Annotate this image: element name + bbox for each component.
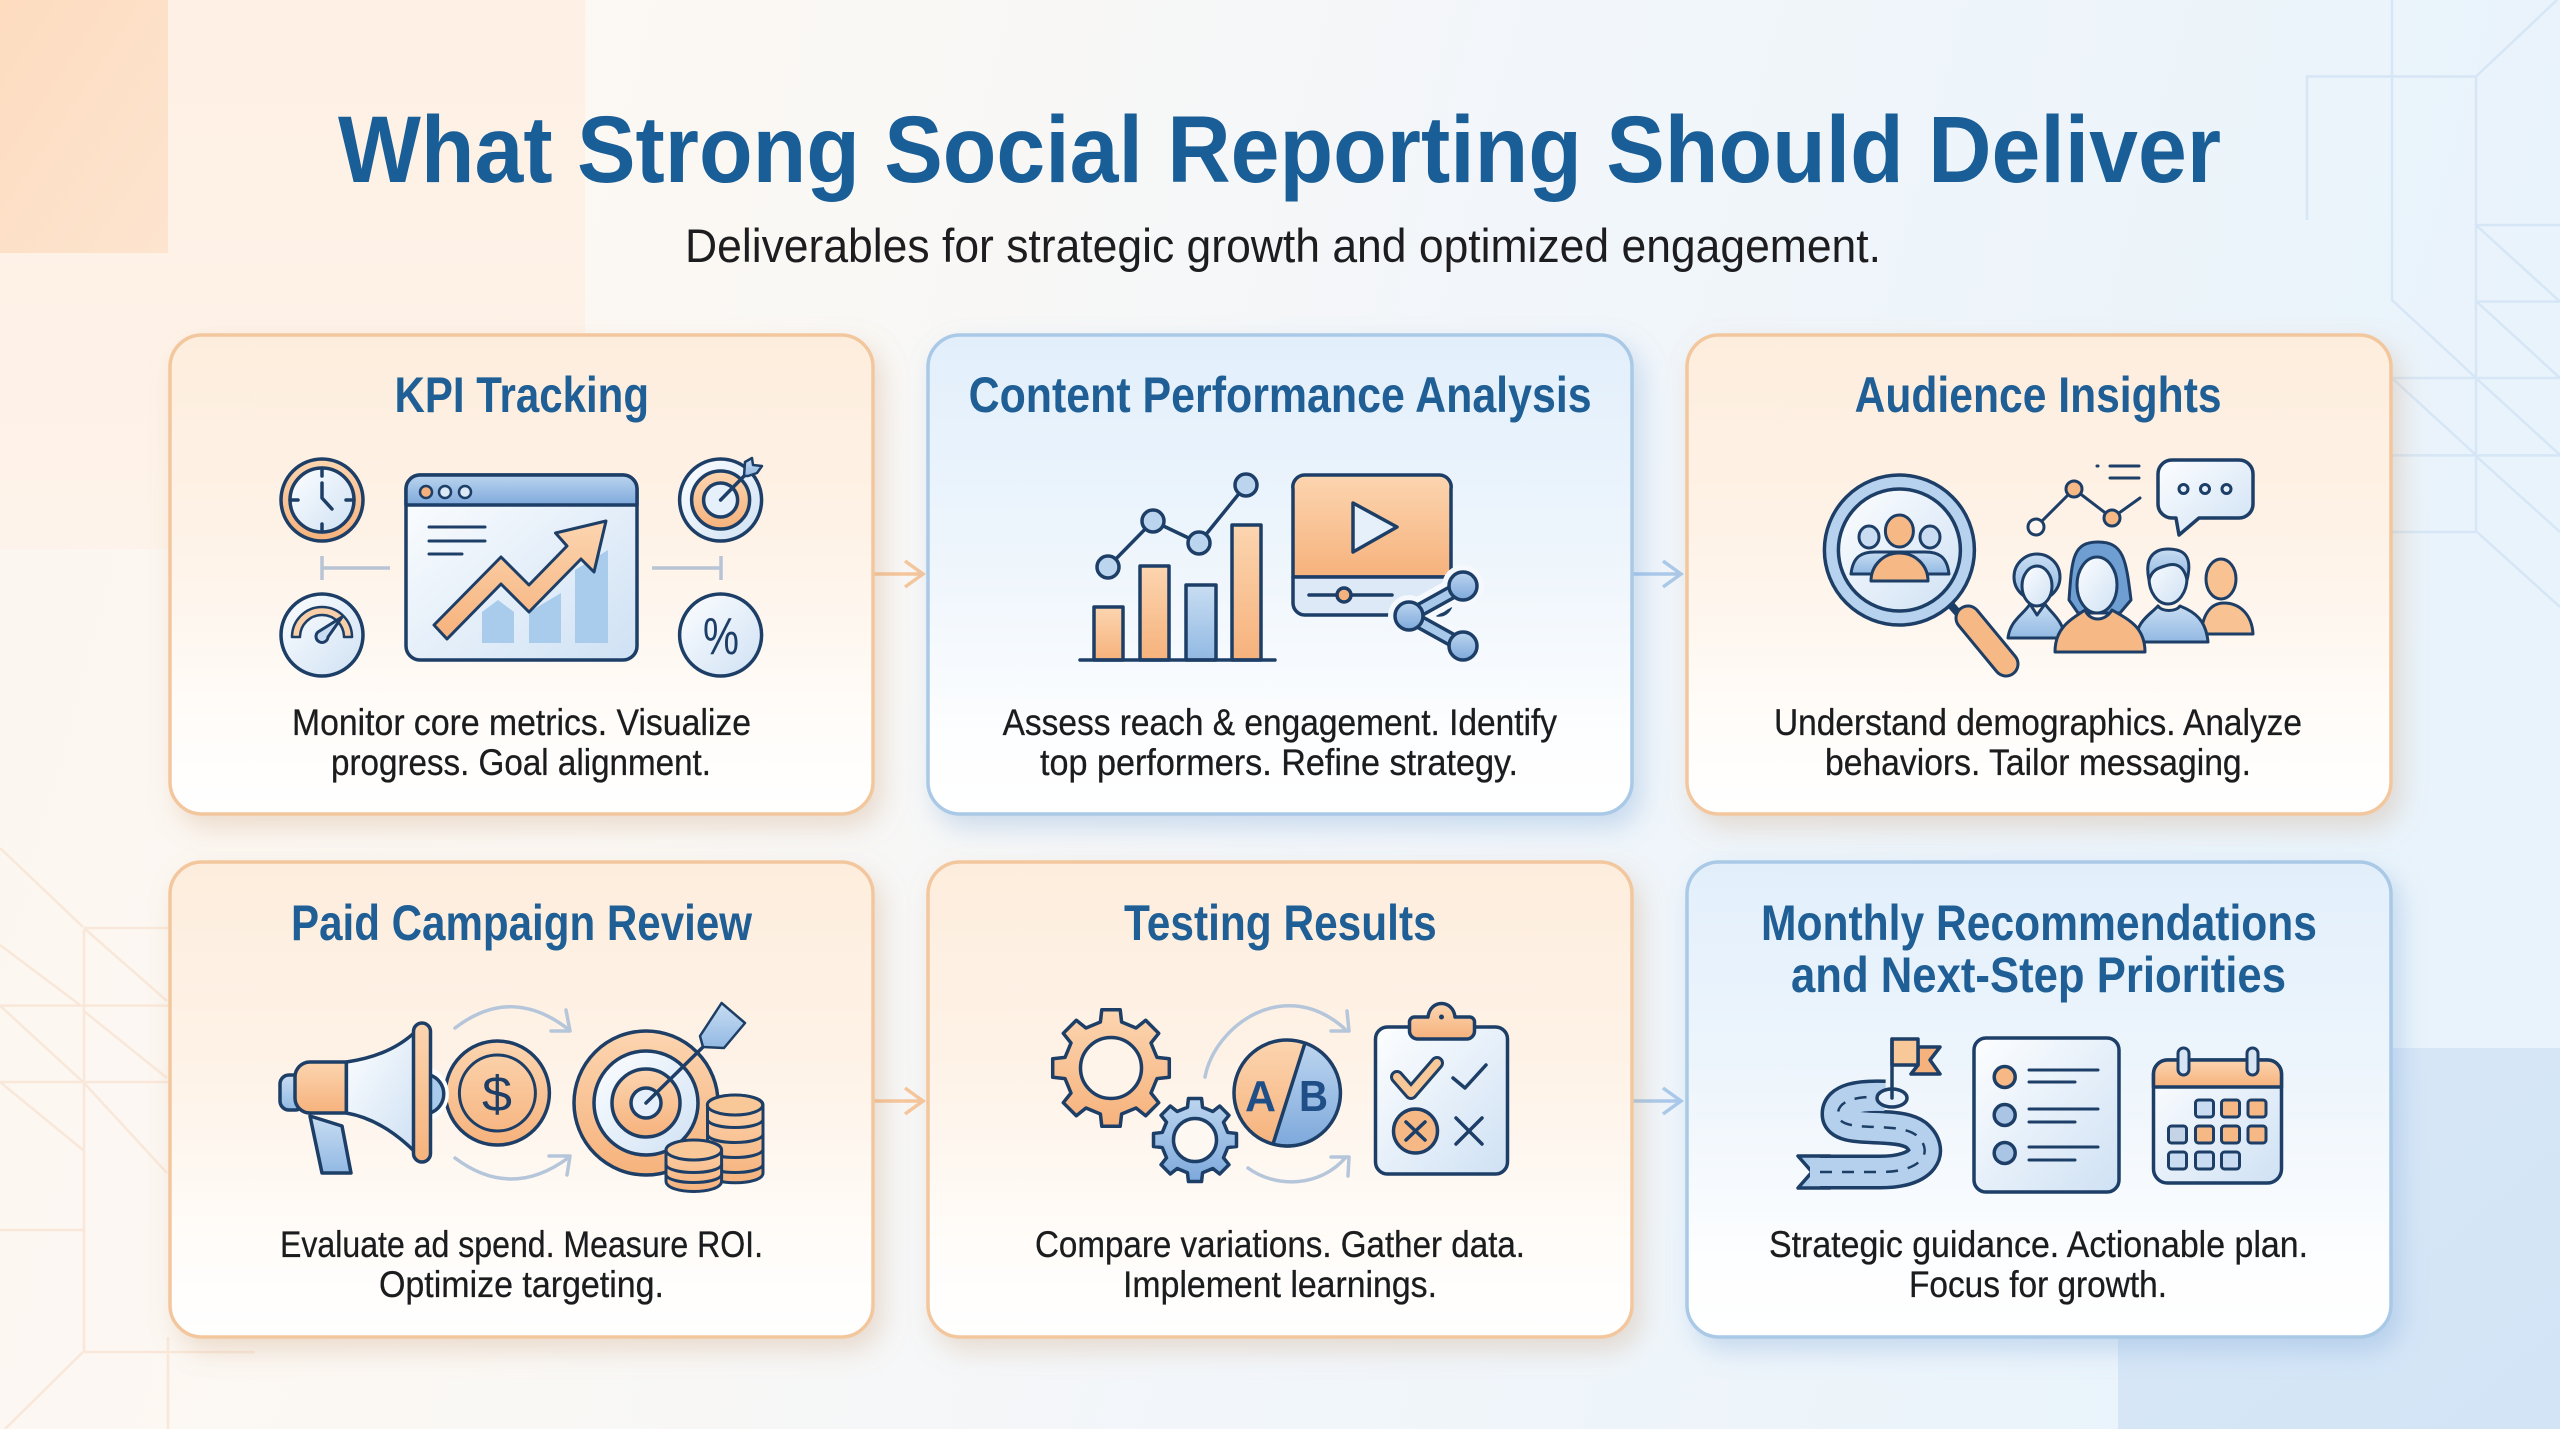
icon: video player with share symbol <box>1293 475 1484 660</box>
heading: Audience Insights: Audience Insights <box>1855 367 2222 423</box>
text: Paid Campaign description: Evaluate ad spend. Measure ROI. <box>280 1224 763 1265</box>
icon: clipboard checklist <box>1376 1004 1508 1174</box>
heading: KPI Tracking: KPI Tracking <box>394 367 649 423</box>
text: Monthly Recommendations description <box>1769 1224 2308 1305</box>
heading: Monthly Recommendations and Next-Step Priorities: Monthly Recommendations <box>1761 895 2317 951</box>
panel: Audience Insights <box>1687 335 2391 814</box>
heading: Content Performance Analysis: Content Performance Analysis <box>969 367 1592 423</box>
arrow: Content Performance Analysis to Audience Insights <box>1632 561 1681 587</box>
icon: priorities list <box>1974 1038 2119 1192</box>
icon: megaphone <box>280 1023 444 1173</box>
arrow: Paid Campaign Review to Testing Results <box>873 1088 923 1114</box>
icon: group of people <box>2008 542 2253 652</box>
text: Audience Insights description <box>1774 702 2302 783</box>
icon: calendar <box>2154 1048 2282 1183</box>
icon: bar chart with trend line <box>1080 474 1275 660</box>
text: Audience Insights description: Understand demographics. Analyze <box>1774 702 2302 743</box>
title: What Strong Social Reporting Should Deliver <box>338 97 2221 203</box>
text: Testing Results description: Implement learnings. <box>1123 1264 1437 1305</box>
icon: A/B test circle: B <box>1299 1072 1328 1121</box>
text: Audience Insights description: behaviors. Tailor messaging. <box>1825 742 2251 783</box>
text: Paid Campaign description: Optimize targeting. <box>379 1264 664 1305</box>
text: Content Performance description: top performers. Refine strategy. <box>1040 742 1518 783</box>
text: Testing Results description <box>1035 1224 1525 1305</box>
text: Paid Campaign description <box>280 1224 763 1305</box>
icon: magnifier over group <box>1824 475 2006 664</box>
icon: clock <box>281 459 363 541</box>
text: Testing Results description: Compare variations. Gather data. <box>1035 1224 1525 1265</box>
connector lines <box>322 556 721 580</box>
icon: dashboard window with rising arrow <box>406 475 637 660</box>
icon: target with arrow <box>574 1003 745 1175</box>
icon: A/B test circle: A <box>1245 1072 1276 1121</box>
arrow: Testing Results to Monthly Recommendations <box>1632 1088 1681 1114</box>
panel: Paid Campaign Review <box>170 862 873 1337</box>
icon: coin stacks <box>666 1095 763 1192</box>
text: KPI Tracking description: Monitor core metrics. Visualize <box>292 702 751 743</box>
text: Content Performance description: Assess reach & engagement. Identify <box>1003 702 1557 743</box>
icon: speech bubble <box>2158 460 2253 535</box>
arrows: testing cycle <box>1205 1006 1349 1182</box>
heading: Testing Results: Testing Results <box>1124 895 1437 951</box>
text: Monthly Recommendations description: Focus for growth. <box>1909 1264 2167 1305</box>
panel: Monthly Recommendations and Next-Step Priorities <box>1687 862 2391 1337</box>
text: Monthly Recommendations description: Strategic guidance. Actionable plan. <box>1769 1224 2308 1265</box>
icon: mini trend line <box>2028 466 2140 535</box>
icon: winding road with flag <box>1798 1039 1940 1188</box>
icon: dollar coin: $ <box>482 1066 512 1122</box>
text: Content Performance description <box>1003 702 1557 783</box>
heading: Monthly Recommendations and Next-Step Priorities <box>1761 895 2317 1003</box>
icon: target <box>680 458 762 541</box>
heading: Monthly Recommendations and Next-Step Priorities: and Next-Step Priorities <box>1791 947 2286 1003</box>
text: KPI Tracking description <box>292 702 751 783</box>
text: KPI Tracking description: progress. Goal alignment. <box>331 742 711 783</box>
arrows: spend cycle <box>455 1007 570 1179</box>
icon: percent <box>680 594 762 676</box>
icon: A/B test circle <box>1234 1040 1340 1146</box>
heading: Paid Campaign Review: Paid Campaign Review <box>291 895 752 951</box>
icon: gauge <box>281 594 363 676</box>
panel: KPI Tracking <box>170 335 873 814</box>
icon: percent: % <box>703 608 739 666</box>
icon: gears <box>1053 1010 1236 1181</box>
subtitle: Deliverables for strategic growth and optimized engagement. <box>685 219 1881 272</box>
arrow: KPI Tracking to Content Performance Analysis <box>873 561 923 587</box>
panel: Testing Results <box>928 862 1632 1337</box>
icon: KPI dashboard cluster <box>281 458 762 676</box>
panel: Content Performance Analysis <box>928 335 1632 814</box>
icon: dollar coin <box>445 1041 549 1145</box>
